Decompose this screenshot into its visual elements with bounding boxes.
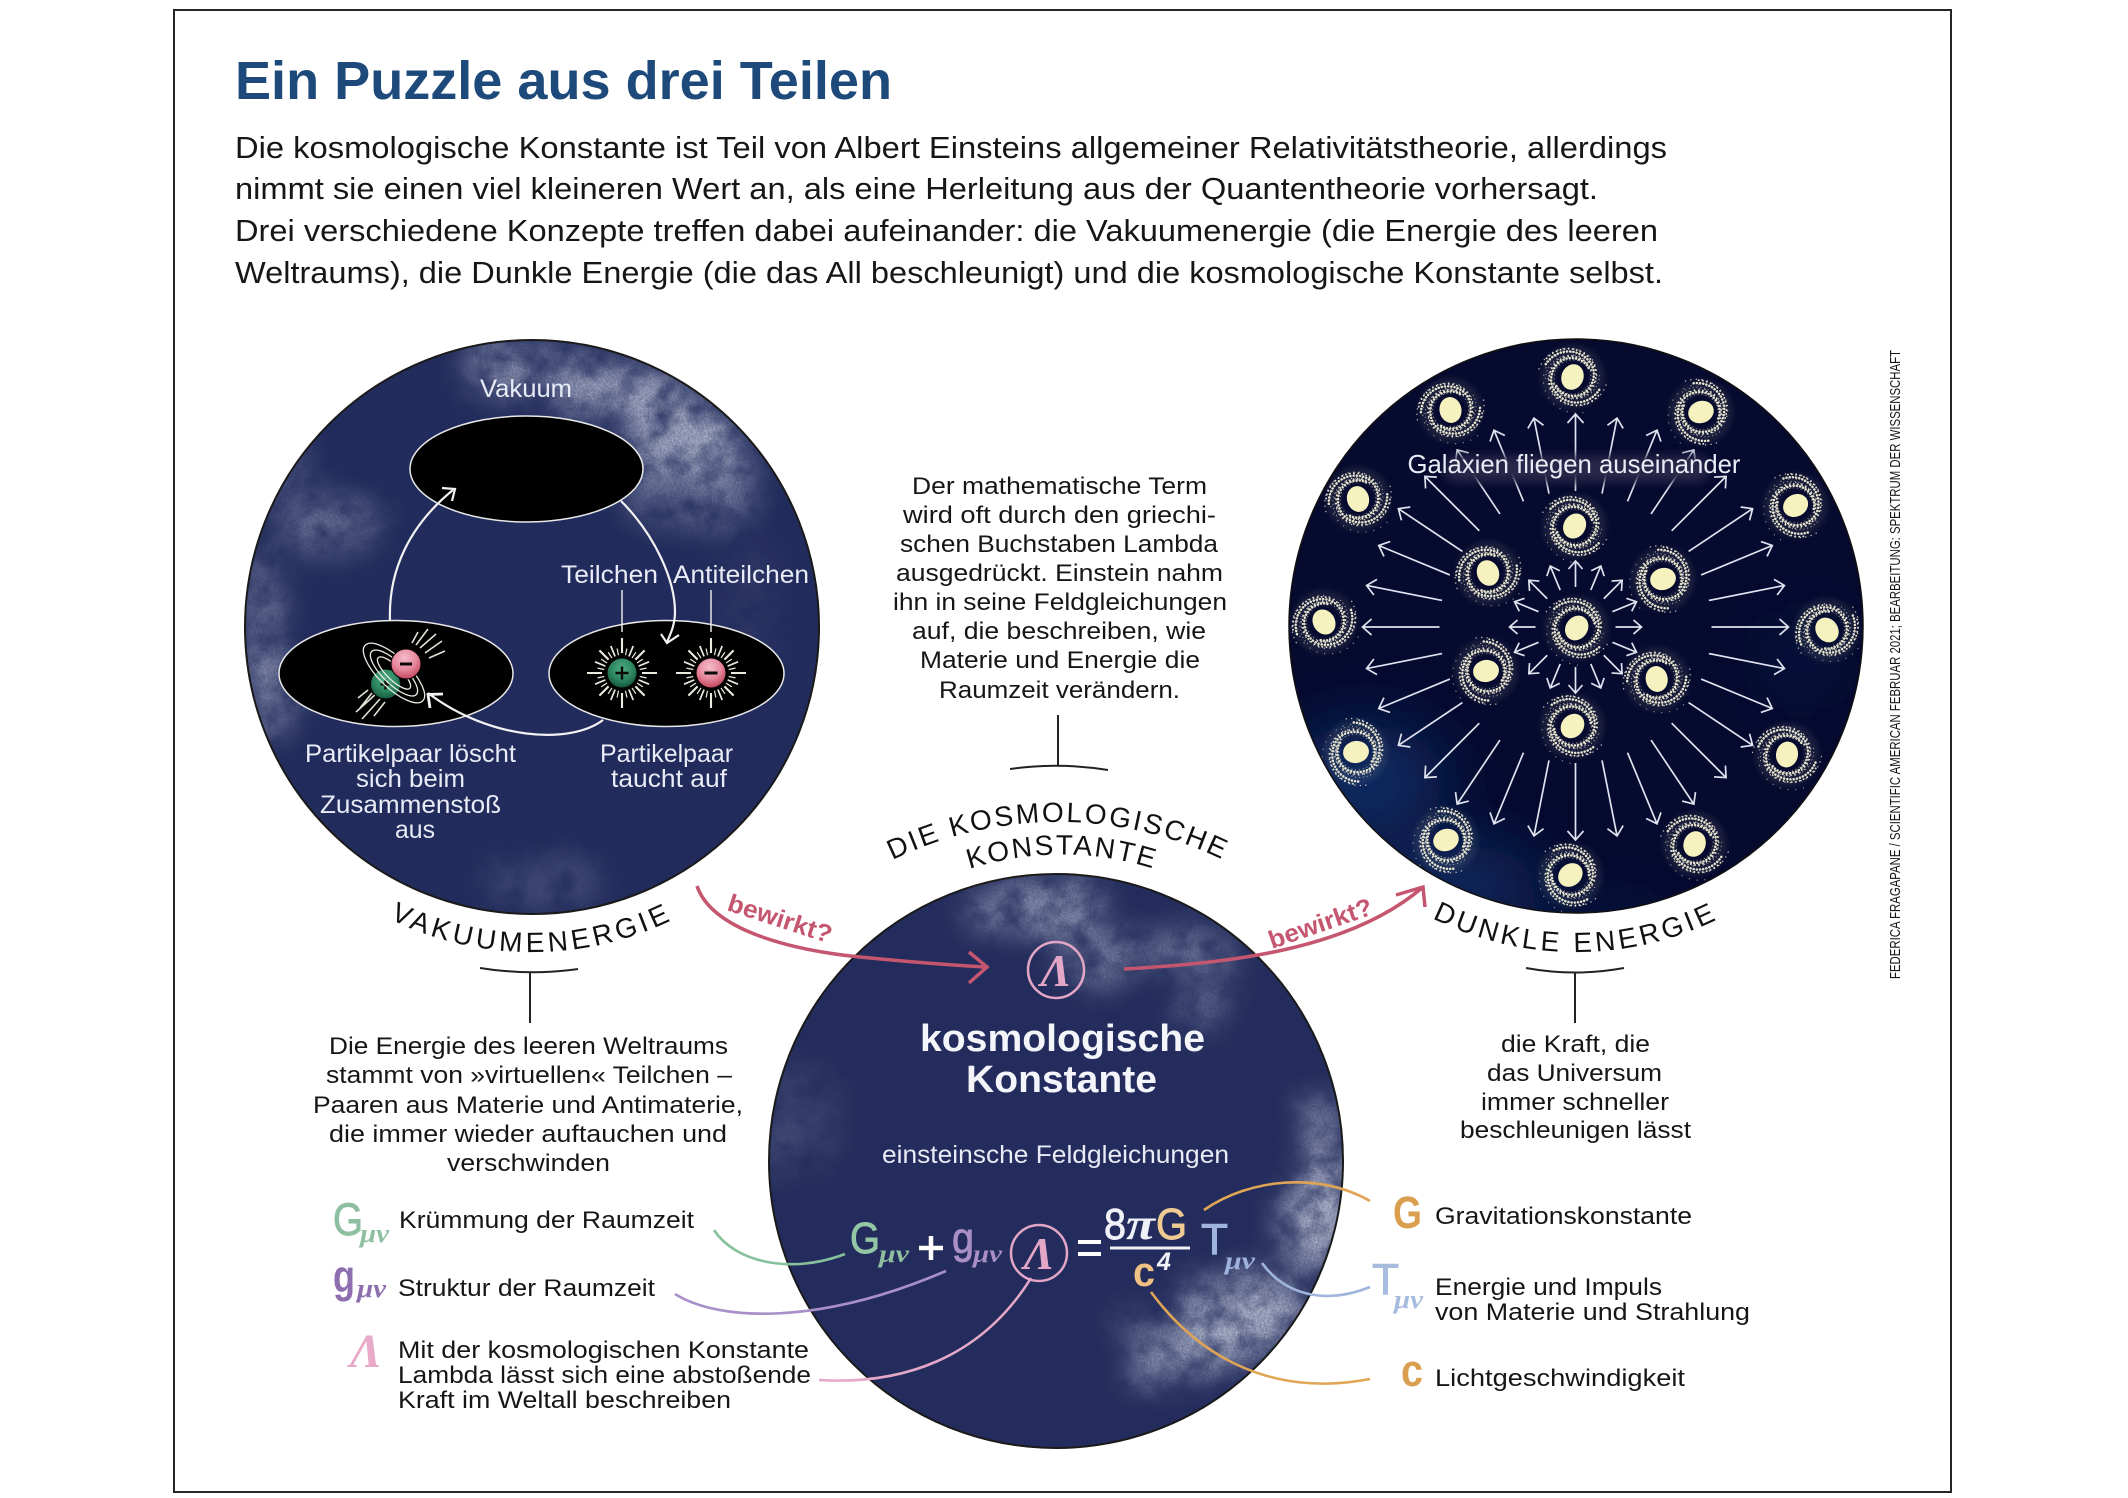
text block: mathematical term: wird oft durch den griechi- (902, 502, 1216, 529)
caption: Partikelpaar löscht sich: aus (395, 816, 435, 844)
label: Vakuum: Vakuum (480, 375, 572, 403)
cycle arrows (390, 488, 679, 735)
equation: π (1126, 1200, 1156, 1249)
text block: mathematical term: Materie und Energie die (920, 647, 1200, 674)
panel: Dunkle Energie circle (1272, 332, 1888, 939)
text block: mathematical term (893, 473, 1227, 704)
arrow: bewirkt left: bewirkt? (724, 889, 836, 949)
text block: Vakuumenergie description: Die Energie des leeren Weltraums (329, 1033, 728, 1060)
text block: Dunkle Energie description: beschleunigen lässt (1460, 1117, 1691, 1144)
legend: lambda: Lambda lässt sich eine abstoßende (398, 1362, 811, 1389)
caption: Partikelpaar taucht auf (600, 740, 733, 793)
intro text: nimmt sie einen viel kleineren Wert an, als eine Herleitung aus der Quantentheorie vorhersagt. (235, 172, 1598, 206)
caption: Partikelpaar löscht sich: Partikelpaar löscht (305, 740, 516, 768)
legend: g mu nu: g (333, 1251, 355, 1302)
legend: G mu nu: Krümmung der Raumzeit (399, 1207, 694, 1234)
heading: kosmologische Konstante: kosmologische (920, 1018, 1205, 1060)
heading: Die kosmologische Konstante: KONSTANTE (966, 835, 1156, 868)
text block: Vakuumenergie description (313, 1033, 743, 1177)
text block: Dunkle Energie description: das Universum (1487, 1060, 1662, 1087)
arrow: bewirkt right (1124, 887, 1425, 969)
text block: mathematical term: schen Buchstaben Lambda (900, 531, 1218, 558)
heading: Dunkle Energie: DUNKLE ENERGIE (1434, 902, 1716, 952)
legend: T mu nu: T (1372, 1255, 1399, 1304)
heading: Vakuumenergie: VAKUUMENERGIE (396, 902, 670, 952)
labels: Teilchen and Antiteilchen (561, 561, 809, 632)
caption: Partikelpaar taucht auf: Partikelpaar (600, 740, 733, 768)
equation: 8 (1104, 1200, 1126, 1249)
legend: G mu nu (333, 1194, 694, 1248)
legend: G gravitational constant (1393, 1187, 1692, 1238)
legend: g mu nu (333, 1251, 655, 1303)
legend: G gravitational constant: G (1393, 1187, 1422, 1238)
title: Ein Puzzle aus drei Teilen (235, 51, 892, 111)
intro text: Drei verschiedene Konzepte treffen dabei aufeinander: die Vakuumenergie (die Energie des leeren (235, 214, 1658, 248)
caption: Partikelpaar löscht sich: Zusammenstoß (320, 791, 501, 819)
equation (850, 1200, 1256, 1295)
legend: T mu nu: μν (1392, 1285, 1424, 1314)
text block: Vakuumenergie description: verschwinden (447, 1150, 610, 1177)
labels: Teilchen and Antiteilchen: Antiteilchen (673, 561, 809, 589)
leader lines (675, 1182, 1370, 1384)
equation: g (952, 1214, 974, 1263)
legend: T mu nu: von Materie und Strahlung (1435, 1299, 1750, 1326)
intro text: Weltraums), die Dunkle Energie (die das All beschleunigt) und die kosmologische Konstante selbst. (235, 256, 1663, 290)
equation: G (1156, 1200, 1187, 1249)
arrow: bewirkt right: bewirkt? (1265, 893, 1376, 955)
equation: 4 (1156, 1248, 1171, 1276)
legend: G mu nu: μν (358, 1219, 390, 1248)
equation: T (1201, 1215, 1228, 1264)
text block: Vakuumenergie description: stammt von »virtuellen« Teilchen – (326, 1062, 732, 1089)
legend: c speed of light (1401, 1345, 1685, 1396)
subheading: einsteinsche Feldgleichungen: einsteinsche Feldgleichungen (882, 1141, 1229, 1169)
heading: kosmologische Konstante: Konstante (966, 1059, 1157, 1101)
legend: G mu nu: G (333, 1194, 363, 1245)
labels: Teilchen and Antiteilchen: Teilchen (561, 561, 658, 589)
panel: Vakuumenergie circle (240, 340, 819, 914)
brace: kosmologische Konstante (1010, 715, 1108, 770)
legend: g mu nu: μν (355, 1274, 387, 1303)
particle: pink minus (676, 638, 746, 708)
panel: kosmologische Konstante circle (760, 874, 1349, 1448)
radial arrows (1362, 414, 1788, 840)
arrow: bewirkt left (697, 886, 987, 983)
heading: kosmologische Konstante (920, 1018, 1205, 1101)
colliding particles: + (380, 674, 391, 696)
equation: G (850, 1214, 880, 1263)
legend: G gravitational constant: Gravitationskonstante (1435, 1203, 1692, 1230)
text block: Dunkle Energie description (1460, 1031, 1691, 1144)
intro text: Die kosmologische Konstante ist Teil von Albert Einsteins allgemeiner Relativitätstheorie, allerdings (235, 131, 1667, 165)
legend: c speed of light: c (1401, 1345, 1423, 1396)
legend: lambda (347, 1325, 811, 1414)
brace: Dunkle Energie (1526, 968, 1624, 1023)
label: Galaxien fliegen auseinander: Galaxien fliegen auseinander (1408, 449, 1741, 479)
legend: g mu nu: Struktur der Raumzeit (398, 1275, 655, 1302)
text block: mathematical term: auf, die beschreiben, wie (912, 618, 1206, 645)
equation: Λ (1021, 1228, 1054, 1279)
text block: mathematical term: ihn in seine Feldgleichungen (893, 589, 1227, 616)
heading: Die kosmologische Konstante: DIE KOSMOLOGISCHE (886, 802, 1228, 859)
legend: lambda: Kraft im Weltall beschreiben (398, 1387, 731, 1414)
legend: T mu nu (1372, 1255, 1750, 1326)
equation: μν (877, 1241, 910, 1268)
caption: Partikelpaar taucht auf: taucht auf (611, 765, 727, 793)
equation: μν (971, 1241, 1003, 1268)
caption: Partikelpaar löscht sich: sich beim (356, 765, 465, 793)
text block: mathematical term: Der mathematische Term (912, 473, 1207, 500)
brace: Vakuumenergie (480, 968, 578, 1023)
intro text (235, 131, 1667, 290)
text block: Dunkle Energie description: die Kraft, die (1501, 1031, 1650, 1058)
caption: Partikelpaar löscht sich (305, 740, 516, 844)
text block: Vakuumenergie description: Paaren aus Materie und Antimaterie, (313, 1092, 743, 1119)
icon: lambda circle: Λ (1038, 945, 1071, 996)
ellipse: particle pair annihilates (279, 620, 513, 726)
text block: mathematical term: ausgedrückt. Einstein nahm (896, 560, 1223, 587)
ellipse: particle pair appears (549, 620, 784, 726)
text block: mathematical term: Raumzeit verändern. (939, 677, 1180, 704)
credit line: FEDERICA FRAGAPANE / SCIENTIFIC AMERICAN FEBRUAR 2021; BEARBEITUNG: SPEKTRUM DER WISSENSCHAFT (1888, 350, 1904, 979)
galaxies (1291, 344, 1862, 912)
legend: T mu nu: Energie und Impuls (1435, 1274, 1662, 1301)
icon: lambda circle (1028, 942, 1084, 998)
legend: c speed of light: Lichtgeschwindigkeit (1435, 1365, 1685, 1392)
legend: lambda: Λ (347, 1325, 382, 1378)
colliding particles (355, 629, 445, 719)
equation: c (1133, 1248, 1155, 1295)
equation: μν (1223, 1248, 1256, 1275)
particle: green plus (587, 638, 657, 708)
text block: Dunkle Energie description: immer schneller (1481, 1089, 1669, 1116)
legend: lambda: Mit der kosmologischen Konstante (398, 1337, 809, 1364)
text block: Vakuumenergie description: die immer wieder auftauchen und (329, 1121, 727, 1148)
vacuum ellipse (410, 416, 643, 522)
